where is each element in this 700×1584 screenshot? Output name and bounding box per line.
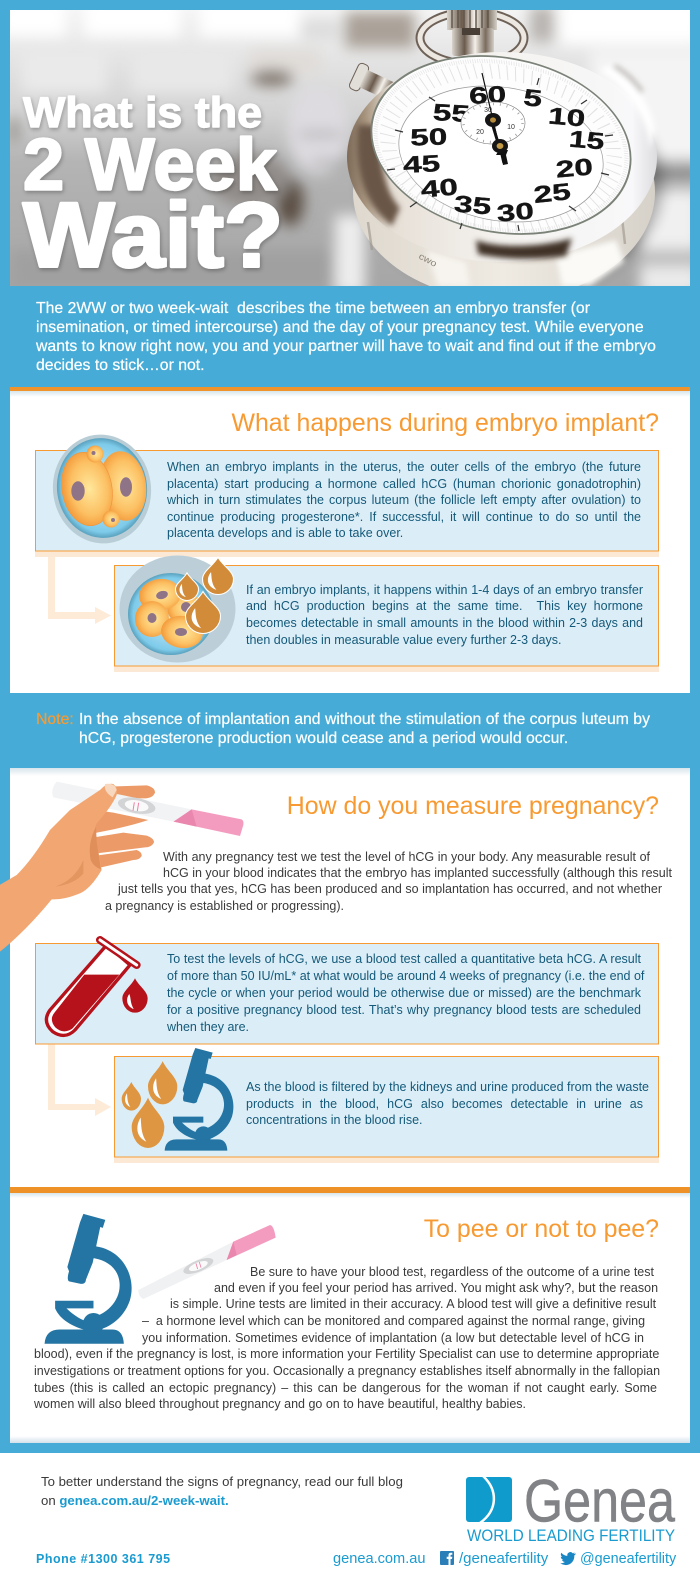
text: /geneafertility — [459, 1550, 548, 1567]
text: Be sure to have your blood test, regardless of the outcome of a urine test — [250, 1265, 654, 1279]
glass rim — [370, 55, 632, 235]
text: and even if you feel your period has arrived. You might ask why?, but the reason — [214, 1281, 658, 1295]
box 4 — [114, 1056, 659, 1163]
logo tagline: WORLD LEADING FERTILITY — [467, 1527, 675, 1545]
sub dial: 20 — [476, 129, 484, 136]
icon: pregnancy test strip — [138, 1225, 276, 1299]
numerals — [402, 82, 605, 227]
text: decides to stick…or not. — [36, 357, 205, 374]
text: The 2WW or two week-wait describes the time between an embryo transfer (or — [36, 300, 590, 317]
side button — [349, 62, 394, 95]
icon: urine drops and microscope — [122, 1048, 233, 1151]
text: – a hormone level which can be monitored and compared against the normal range, giving — [142, 1314, 645, 1328]
text: wants to know right now, you and your partner will have to wait and find out if the embryo — [36, 338, 656, 355]
icon: twitter — [560, 1552, 576, 1565]
ring — [420, 12, 524, 64]
sub dial: 10 — [507, 124, 515, 131]
text: blood), even if the pregnancy is lost, is more information your Fertility Specialist can use to determine appropriate — [34, 1347, 659, 1361]
text: When an embryo implants in the uterus, the outer cells of the embryo (the future — [167, 460, 641, 474]
icon: four-cell embryo with drops — [120, 556, 236, 662]
footer links — [333, 1550, 676, 1567]
text: box 3 — [167, 952, 644, 1034]
palm and thumb — [0, 784, 117, 952]
panel: to pee section — [10, 1187, 690, 1443]
crown — [447, 10, 497, 56]
numerals: 35 — [453, 191, 492, 220]
text: box 4 — [246, 1080, 649, 1127]
sub dial: 30 — [484, 107, 492, 114]
icon: facebook — [440, 1551, 454, 1565]
text: hCG, progesterone production would cease and a period would occur. — [79, 730, 568, 747]
back fingers — [90, 785, 155, 868]
test strip — [52, 782, 243, 836]
tick band — [372, 71, 630, 225]
title: What is the — [23, 89, 262, 137]
text: genea.com.au — [333, 1551, 426, 1567]
text: placenta develops and is able to take over. — [167, 526, 403, 540]
title — [23, 89, 283, 286]
numerals: 25 — [532, 179, 572, 209]
icon: microscope — [45, 1214, 132, 1344]
text: investigations or treatment options for you. Occasionally a pregnancy establishes itself abnormally in the fallopian — [34, 1364, 660, 1378]
panel: embryo implant section — [10, 387, 690, 693]
numerals: 10 — [547, 103, 586, 132]
text: the cycle or when your period would be otherwise due or missed) are the benchmark — [167, 986, 641, 1000]
box 2 — [114, 566, 659, 672]
text: measure pregnancy paragraph — [105, 850, 672, 913]
logo wordmark: Genea — [524, 1468, 676, 1534]
hands — [482, 73, 508, 165]
text: insemination, or timed intercourse) and the day of your pregnancy test. While everyone — [36, 319, 644, 336]
note text — [36, 711, 650, 747]
icon: hand holding test — [0, 782, 243, 952]
text: With any pregnancy test we test the level of hCG in your body. Any measurable result of — [163, 850, 650, 864]
numerals: 45 — [402, 151, 441, 179]
box 1 — [35, 450, 659, 557]
text: box 2 — [246, 583, 643, 647]
bezel reflections — [357, 65, 655, 259]
text: products in the blood, hCG also becomes detectable in urine as — [246, 1097, 643, 1111]
text: to pee paragraph — [34, 1265, 660, 1411]
text: you information. Sometimes evidence of implantation (a low but detectable level of hCG in — [142, 1331, 644, 1345]
text: continue producing progesterone*. If successful, it will continue to do so until the — [167, 510, 641, 524]
engraved mark: cwo — [417, 252, 439, 270]
major ticks — [387, 78, 613, 231]
footer blog text — [41, 1474, 403, 1508]
numerals: 60 — [468, 82, 507, 110]
numerals: 55 — [432, 100, 471, 128]
numerals: 15 — [568, 125, 605, 155]
numerals: 5 — [522, 85, 543, 113]
heading: to pee or not to pee: To pee or not to pee? — [424, 1215, 659, 1243]
text: tubes (this is called an ectopic pregnancy) – this can be dangerous for the woman if not caught early. Some — [34, 1381, 657, 1395]
text: then doubles in measurable value every further 2-3 days. — [246, 633, 561, 647]
text: Note: — [36, 711, 74, 728]
watch side wall — [353, 178, 655, 286]
text: just tells you that yes, hCG has been produced and so implantation has occurred, and not whether — [118, 882, 662, 896]
text: which in turn stimulates the corpus luteum (the follicle left empty after ovulation) to — [167, 493, 641, 507]
text: placenta) start producing a hormone called hCG (human chorionic gonadotrophin) — [167, 477, 641, 491]
text: becomes detectable in small amounts in the blood within 2-3 days and — [246, 616, 643, 630]
text: To test the levels of hCG, we use a blood test called a quantitative beta hCG. A result — [167, 952, 641, 966]
text: If an embryo implants, it happens within 1-4 days of an embryo transfer — [246, 583, 643, 597]
text: for a positive pregnancy blood test. That’s why pregnancy blood tests are scheduled — [167, 1003, 641, 1017]
text: women will also bleed throughout pregnancy and go on to have beautiful, healthy babies. — [34, 1397, 526, 1411]
text: concentrations in the blood rise. — [246, 1113, 422, 1127]
heading: embryo implant: What happens during embryo implant? — [231, 409, 659, 437]
connector arrow — [48, 556, 111, 624]
text: a pregnancy is established or progressing). — [105, 899, 344, 913]
panel: measure pregnancy section — [0, 768, 690, 1187]
icon: two-cell embryo — [46, 428, 158, 550]
title: 2 Week — [23, 124, 277, 206]
logo mark — [466, 1476, 512, 1523]
sub dial — [461, 102, 525, 144]
text: is simple. Urine tests are limited in their accuracy. A blood test will give a definitive result — [170, 1297, 656, 1311]
heading: measure pregnancy: How do you measure pregnancy? — [287, 792, 659, 820]
text: As the blood is filtered by the kidneys and urine produced from the waste — [246, 1080, 649, 1094]
text: when they are. — [167, 1020, 249, 1034]
stopwatch — [347, 10, 662, 300]
numerals: 50 — [410, 124, 448, 151]
text: and hCG production begins at the same time. This key hormone — [246, 599, 643, 613]
box 3 — [36, 944, 658, 1044]
text: hCG in your blood indicates that the embryo has implanted successfully (although this result — [163, 866, 672, 880]
microscope — [165, 1048, 233, 1151]
blurred photo background — [0, 0, 700, 295]
text: In the absence of implantation and without the stimulation of the corpus luteum by — [79, 711, 650, 728]
numerals: 40 — [420, 174, 459, 203]
text: box 1 — [167, 460, 641, 540]
drops — [176, 557, 234, 634]
text: on genea.com.au/2-week-wait. — [41, 1493, 229, 1508]
icon: blood test tube — [46, 940, 148, 1035]
text: of more than 50 IU/mL* at what would be around 4 weeks of pregnancy (i.e. the end of — [167, 969, 644, 983]
dial inner track — [398, 86, 604, 222]
phone number: Phone #1300 361 795 — [36, 1552, 171, 1566]
drop shadow of the watch — [580, 137, 670, 286]
text: @geneafertility — [580, 1551, 676, 1567]
bezel — [347, 52, 657, 262]
text: To better understand the signs of pregnancy, read our full blog — [41, 1474, 403, 1489]
logo: Genea — [466, 1468, 676, 1545]
title: Wait? — [23, 184, 283, 286]
intro text — [36, 300, 656, 374]
numerals: 30 — [496, 198, 535, 227]
numerals: 20 — [555, 154, 594, 183]
banner photo with stopwatch — [10, 10, 690, 286]
connector arrow — [48, 1044, 111, 1116]
